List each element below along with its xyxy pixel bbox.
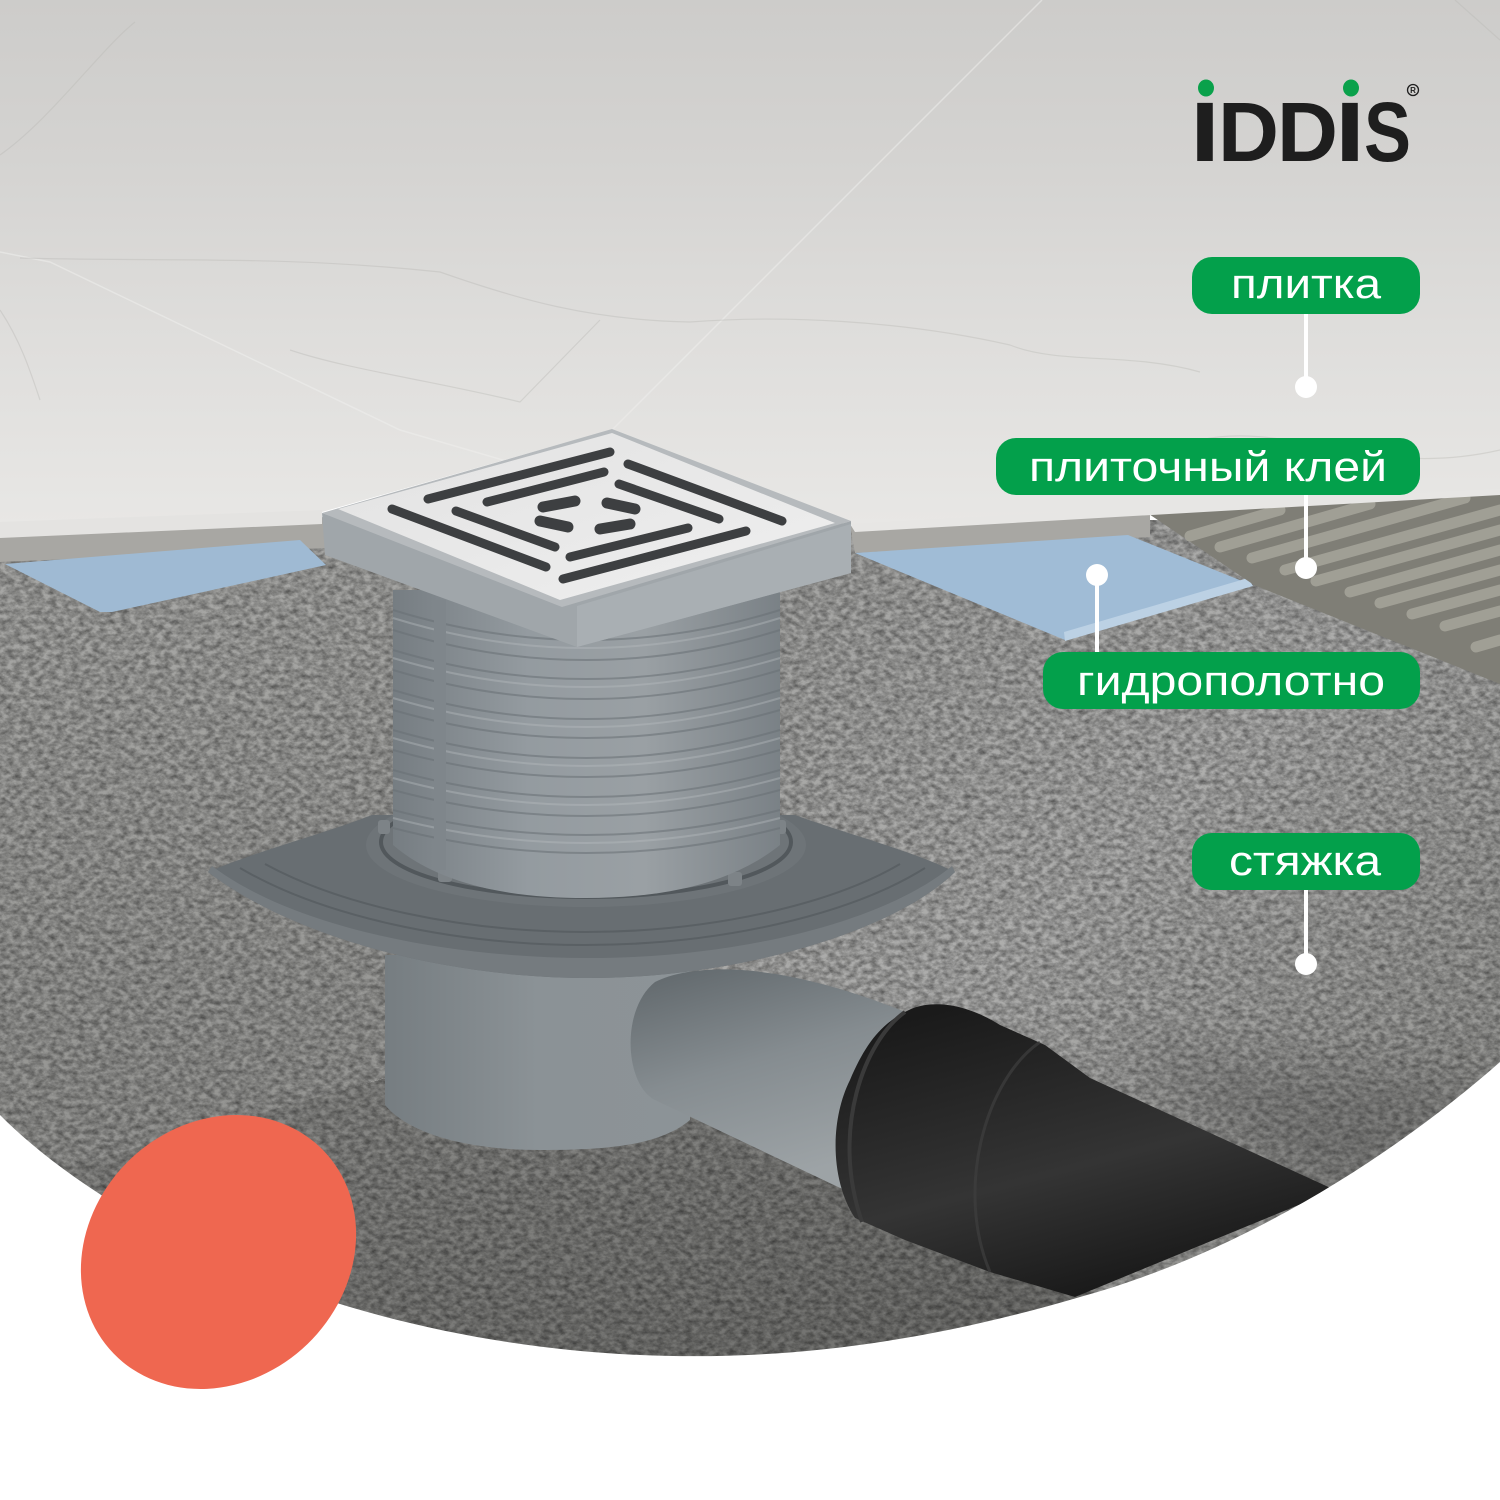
grate slots xyxy=(392,452,782,579)
black rubber pipe xyxy=(836,1004,1335,1297)
concrete screed xyxy=(0,520,1500,1400)
label: плитка xyxy=(1192,257,1420,398)
logo: IDDIS: D xyxy=(1218,85,1279,179)
tile adhesive with ridges xyxy=(1143,485,1500,684)
drain grate xyxy=(322,429,851,647)
marble tile surface xyxy=(0,0,1500,538)
decorative red circle xyxy=(25,1059,412,1445)
label: гидрополотно: гидрополотно xyxy=(1077,657,1385,704)
logo: IDDIS xyxy=(1190,80,1418,179)
wall shading behind pipe xyxy=(1136,1043,1469,1187)
flange pegs xyxy=(378,820,786,886)
grate face xyxy=(338,433,835,600)
grate frame top xyxy=(322,429,851,607)
left wall xyxy=(0,548,420,1170)
logo: IDDIS: I xyxy=(1335,85,1365,179)
label: стяжка xyxy=(1192,833,1420,975)
tile adhesive band xyxy=(0,517,325,562)
membrane: left xyxy=(5,540,326,612)
membrane: right xyxy=(855,535,1253,641)
grey outlet pipe xyxy=(631,969,905,1195)
label: плиточный клей: плиточный клей xyxy=(1029,443,1387,490)
logo: IDDIS: S xyxy=(1364,85,1411,179)
installation flange xyxy=(208,815,955,978)
lower drain body xyxy=(385,955,690,1150)
floor xyxy=(64,1078,1094,1356)
logo: IDDIS: I xyxy=(1190,85,1220,179)
label: гидрополотно xyxy=(1043,564,1420,709)
right wall xyxy=(690,520,1500,1293)
label: плиточный клей xyxy=(996,438,1420,579)
logo: IDDIS: D xyxy=(1277,85,1338,179)
grate frame side xyxy=(322,513,851,647)
label: плитка: плитка xyxy=(1231,260,1382,307)
tile front edge xyxy=(0,510,322,538)
tile seams and marble veins xyxy=(0,0,1042,380)
label: стяжка: стяжка xyxy=(1229,837,1382,884)
ribbed riser cylinder xyxy=(393,590,780,898)
logo: IDDIS: R xyxy=(1410,86,1416,95)
